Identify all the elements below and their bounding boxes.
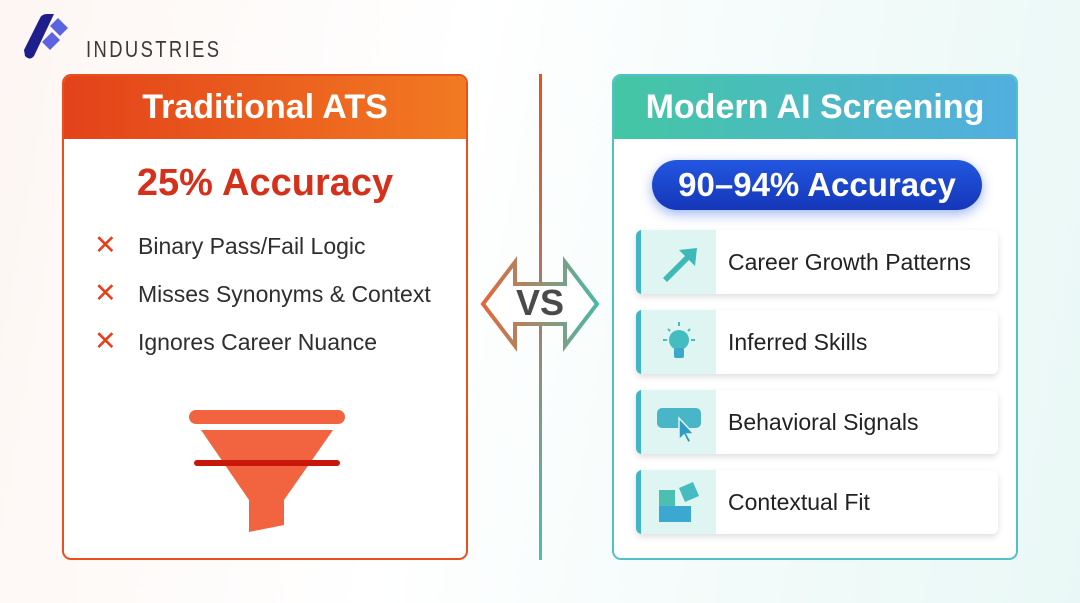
icon: click [657,408,701,442]
logo [24,14,221,62]
heading [614,76,1016,139]
item: inferred skills [636,310,998,374]
heading [64,76,466,139]
item: behavioral signals [636,390,998,454]
heading: Modern AI Screening [646,88,984,126]
panel: traditional ATS [62,74,468,560]
item 2: Misses Synonyms & Context [138,281,431,307]
item: contextual fit [636,470,998,534]
panel: modern AI screening [612,74,1018,560]
list: drawbacks: ✕ [94,230,117,260]
list: drawbacks [94,230,431,356]
vs text: VS [516,282,564,323]
icon: funnel [189,410,345,532]
item: behavioral signals: Behavioral Signals [728,409,919,435]
item: inferred skills: Inferred Skills [728,329,867,355]
icon: bulb [663,322,695,358]
accuracy pill [652,160,982,210]
list: drawbacks: ✕ [94,326,117,356]
heading: Traditional ATS [142,88,388,126]
item: career growth: Career Growth Patterns [728,249,971,275]
item 1: Binary Pass/Fail Logic [138,233,366,259]
icon: arrow [663,248,697,282]
item: career growth [636,230,998,294]
item: contextual fit: Contextual Fit [728,489,870,515]
accuracy pill: 90–94% Accuracy [678,166,956,203]
accuracy: 25% Accuracy [137,162,393,204]
icon: puzzle [659,482,699,522]
brand text: INDUSTRIES [86,36,221,62]
list: drawbacks: ✕ [94,278,117,308]
item 3: Ignores Career Nuance [138,329,377,355]
icon: vs arrows [480,256,600,352]
divider line [539,74,542,560]
icon: logo mark [24,14,68,58]
